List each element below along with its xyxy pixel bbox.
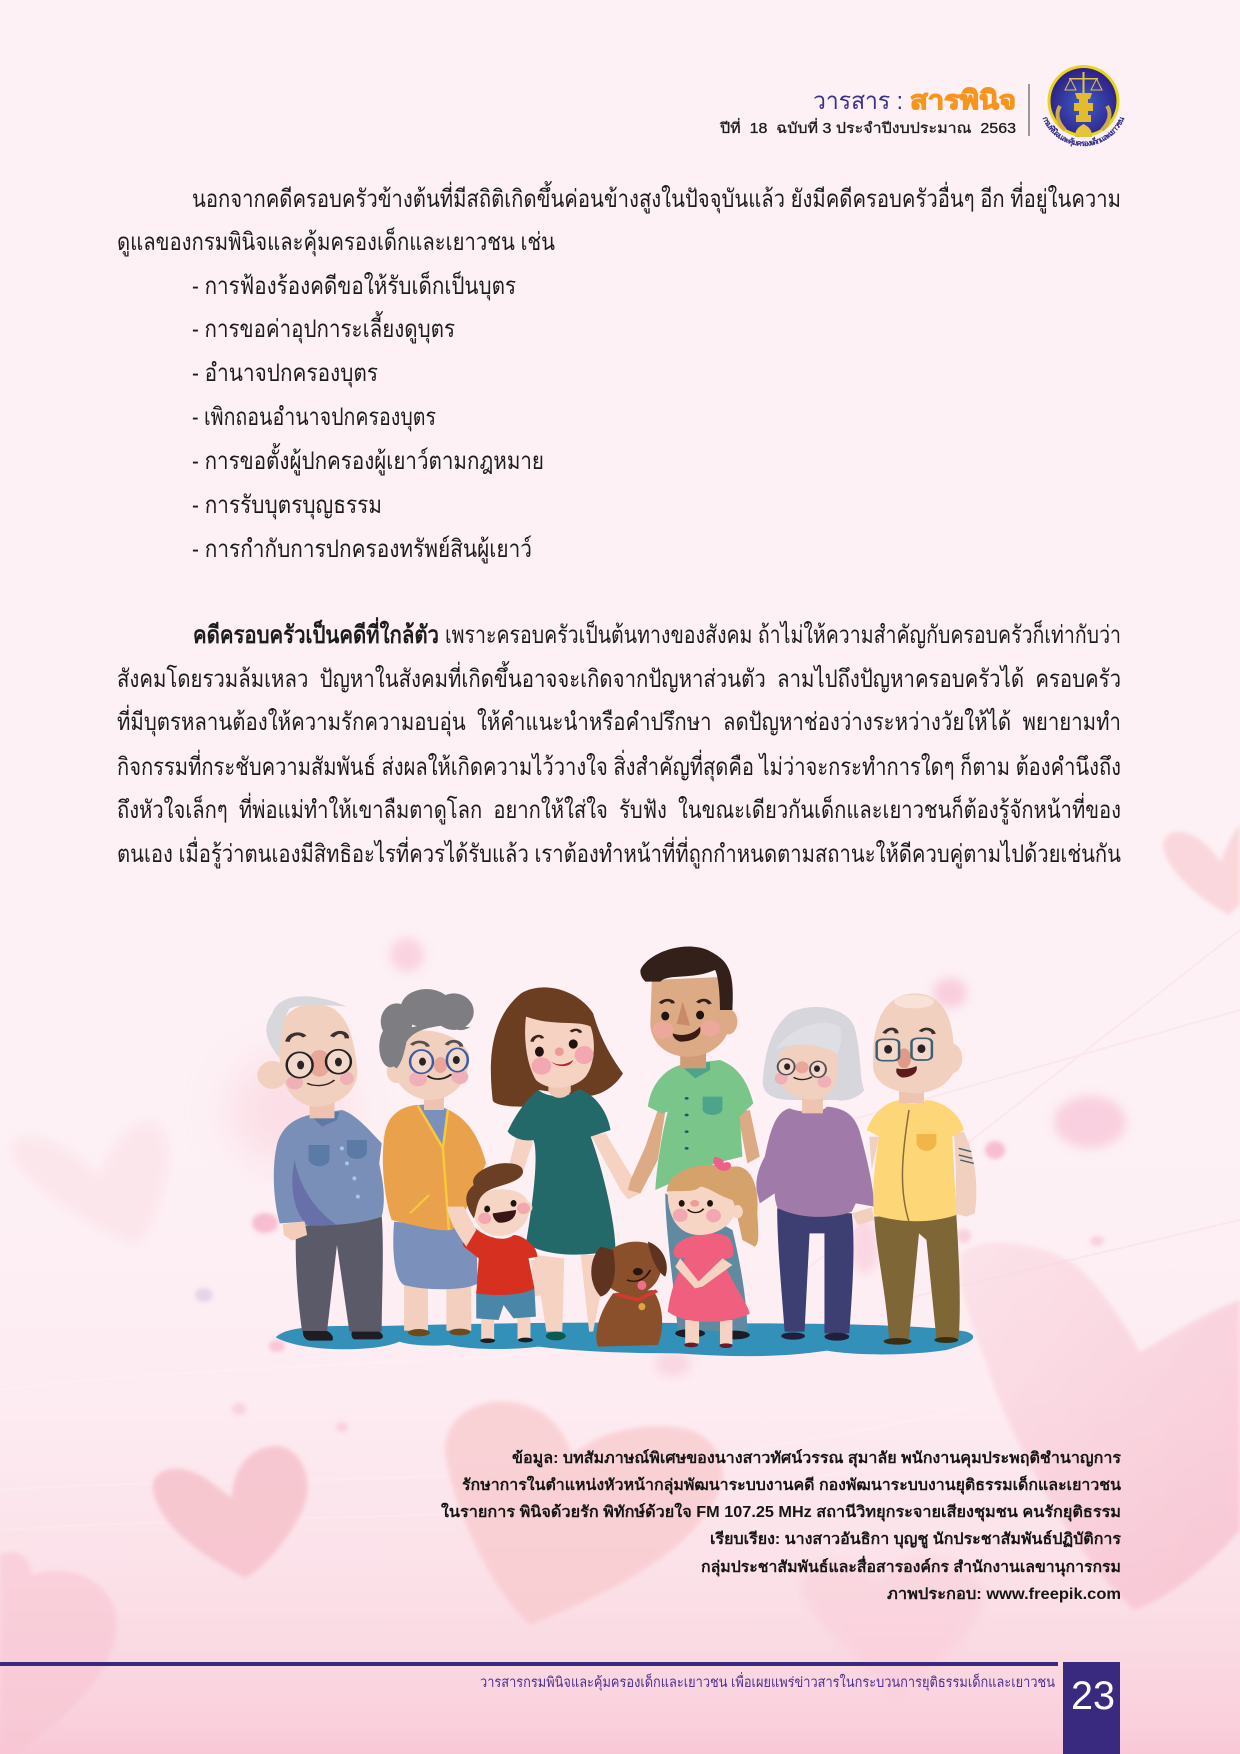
credits: ข้อมูล: บทสัมภาษณ์พิเศษของนางสาวทัศน์วรรณ สุมาลัย พนักงานคุมประพฤติชำนาญการ [512, 1449, 1122, 1469]
main paragraph: คดีครอบครัวเป็นคดีที่ใกล้ตัว [193, 617, 439, 649]
list of family case types: - การกำกับการปกครองทรัพย์สินผู้เยาว์ [192, 535, 532, 564]
credits [441, 1449, 1122, 1603]
list of family case types: - การขอค่าอุปการะเลี้ยงดูบุตร [192, 311, 455, 344]
page number: 23 [1071, 1674, 1115, 1718]
intro paragraph [117, 181, 1121, 257]
credits: กลุ่มประชาสัมพันธ์และสื่อสารองค์กร สำนักงานเลขานุการกรม [701, 1555, 1121, 1577]
list of family case types: - การรับบุตรบุญธรรม [192, 492, 382, 520]
header divider [1028, 84, 1030, 136]
department logo: กรมพินิจและคุ้มครองเด็กและเยาวชน [1042, 117, 1124, 147]
grandfather right [867, 993, 976, 1345]
main paragraph [117, 617, 1121, 869]
list of family case types: - การขอตั้งผู้ปกครองผู้เยาว์ตามกฎหมาย [192, 443, 544, 476]
department logo [1042, 65, 1124, 147]
credits: ในรายการ พินิจด้วยรัก พิทักษ์ด้วยใจ FM 107.25 MHz สถานีวิทยุกระจายเสียงชุมชน คนรักยุติธรรม [441, 1502, 1121, 1522]
intro paragraph: ดูแลของกรมพินิจและคุ้มครองเด็กและเยาวชน เช่น [117, 226, 555, 257]
mother [491, 987, 640, 1340]
page number [1063, 1662, 1120, 1754]
family illustration [257, 946, 976, 1356]
grandmother left [379, 989, 486, 1336]
girl [667, 1157, 758, 1348]
issue line: ปีที่ 18 ฉบับที่ 3 ประจำปีงบประมาณ 2563 [720, 118, 1016, 137]
ground [276, 1323, 973, 1356]
list of family case types: - เพิกถอนอำนาจปกครองบุตร [192, 404, 436, 432]
list of family case types [192, 270, 544, 564]
list of family case types: - การฟ้องร้องคดีขอให้รับเด็กเป็นบุตร [192, 270, 516, 301]
journal title: สารพินิจ [910, 85, 1016, 115]
grandmother right [756, 1007, 874, 1341]
boy [447, 1163, 542, 1343]
footer rule [0, 1662, 1058, 1666]
list of family case types: - อำนาจปกครองบุตร [192, 360, 378, 388]
credits: รักษาการในตำแหน่งหัวหน้ากลุ่มพัฒนาระบบงานคดี กองพัฒนาระบบงานยุติธรรมเด็กและเยาวชน [462, 1474, 1121, 1495]
dog [591, 1242, 667, 1347]
credits: เรียบเรียง: นางสาวอันธิกา บุญชู นักประชาสัมพันธ์ปฏิบัติการ [710, 1530, 1122, 1550]
credits: ภาพประกอบ: www.freepik.com [887, 1586, 1121, 1603]
grandfather left [257, 996, 384, 1341]
journal title: วารสาร : [813, 88, 903, 115]
father [628, 947, 760, 1339]
journal title [813, 85, 1016, 115]
footer tagline: วารสารกรมพินิจและคุ้มครองเด็กและเยาวชน เพื่อเผยแพร่ข่าวสารในกระบวนการยุติธรรมเด็กและเยาวชน [480, 1672, 1055, 1691]
